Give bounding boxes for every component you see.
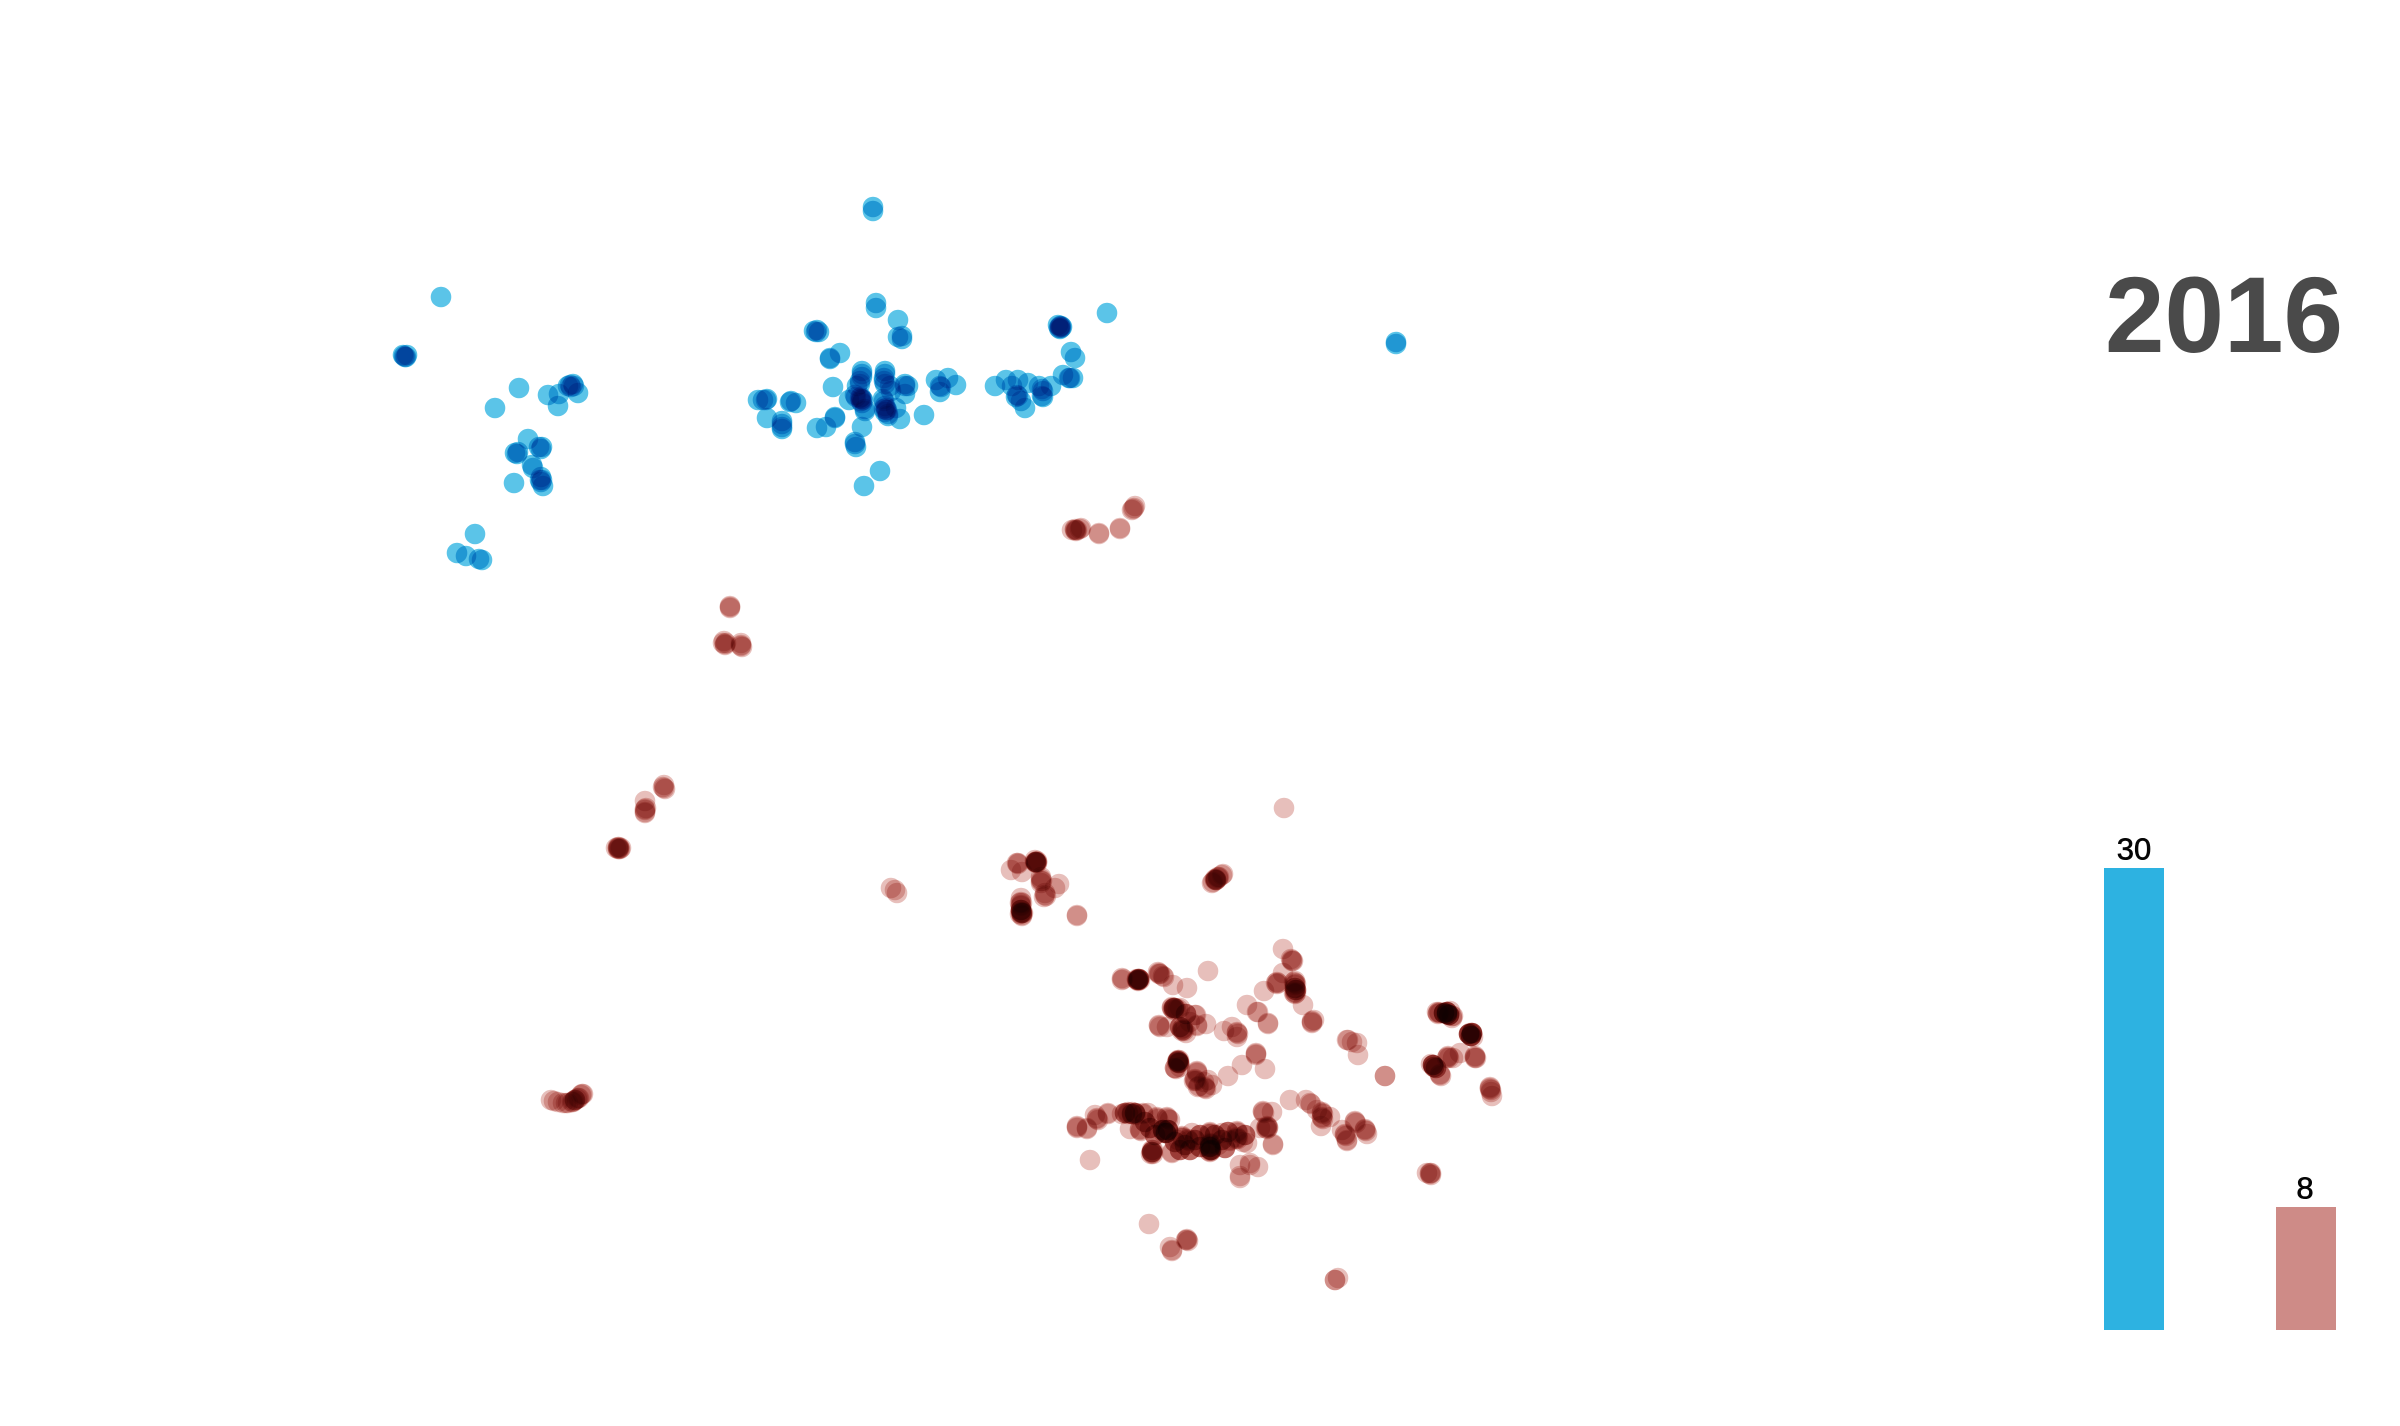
bar label: 8: 8: [2296, 1170, 2314, 1206]
cluster: far right red dots: [1421, 1001, 1502, 1106]
cluster: lower right main red dots: [1112, 939, 1395, 1099]
cluster: lower right red dots: [1139, 1090, 1441, 1290]
cluster: central blue dots: [748, 197, 934, 496]
cluster: central right blue dots: [926, 303, 1117, 418]
cluster: left red dots: [541, 596, 907, 1113]
scatter: blue dots: [393, 197, 1406, 570]
year title: 2016: [2105, 254, 2343, 375]
bar: red 8: [2276, 1207, 2336, 1330]
bar label: 30: 30: [2117, 832, 2151, 866]
cluster: upper red dots: [1062, 496, 1145, 544]
cluster: main red band: [1067, 1102, 1268, 1188]
cluster: isolated right blue dot: [1386, 332, 1406, 354]
cluster: middle red dots: [1001, 798, 1294, 926]
bar: blue 30: [2104, 868, 2164, 1330]
bar chart: [2104, 832, 2336, 1330]
scatter: red dots: [541, 496, 1502, 1290]
cluster: far left blue dots: [393, 287, 588, 570]
